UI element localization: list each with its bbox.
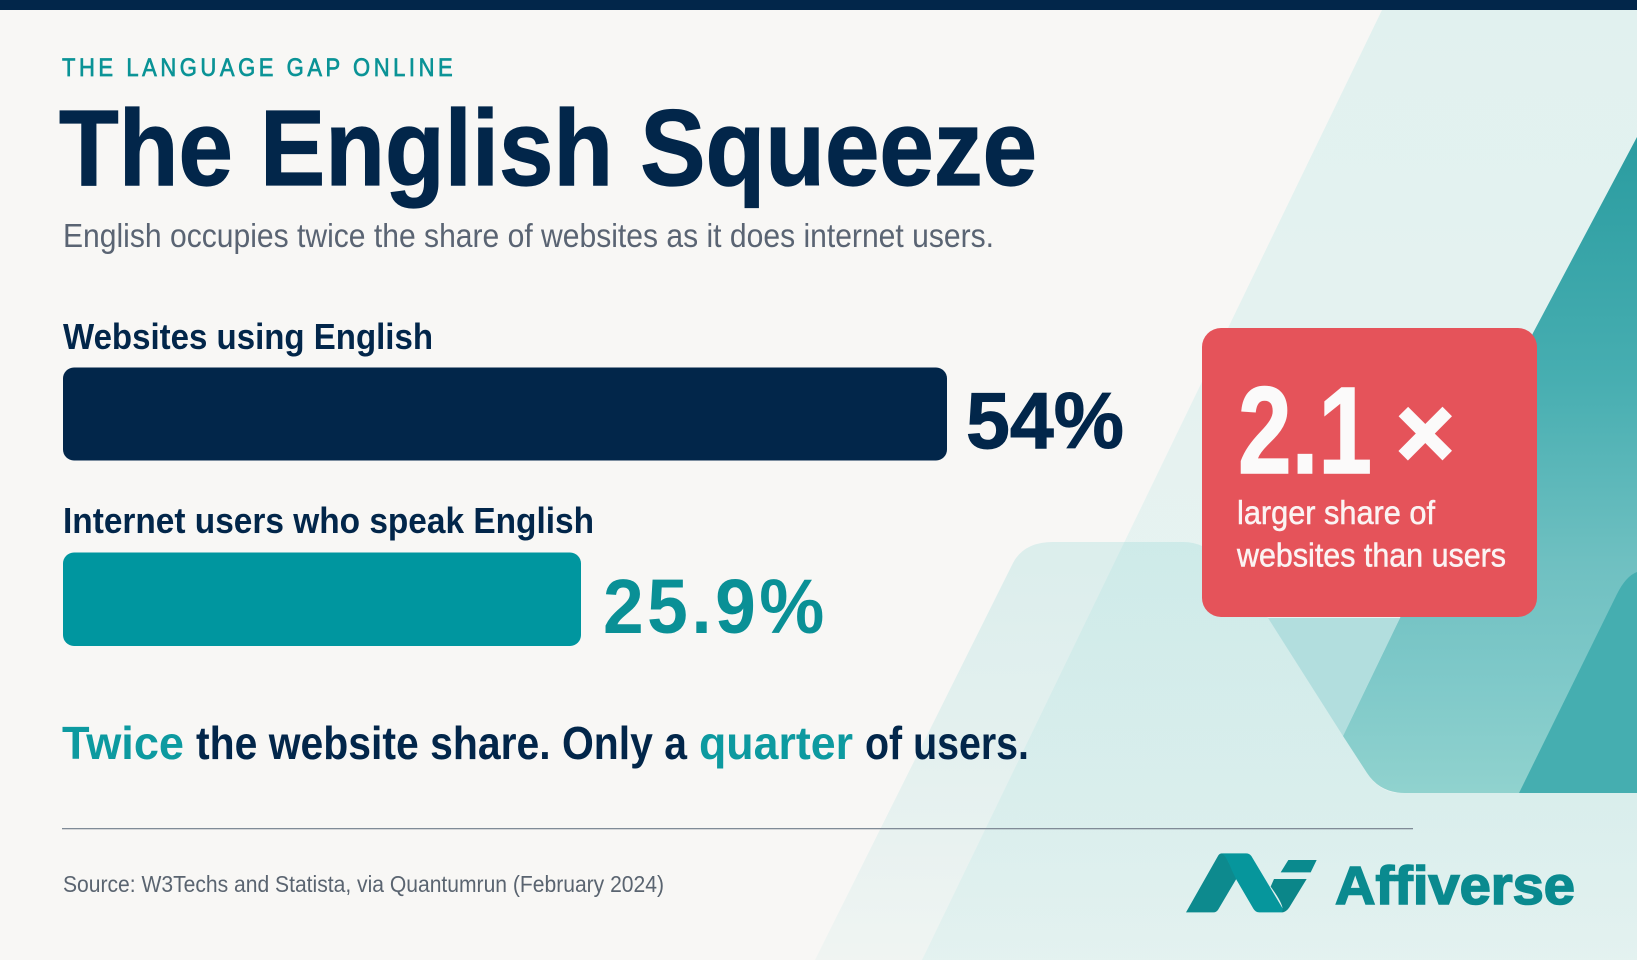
bar row: internet users who speak English (63, 500, 824, 649)
callout number: 2.1 (1238, 363, 1372, 500)
bar label: Websites using English (63, 316, 433, 357)
callout caption: websites than users (1236, 536, 1506, 574)
takeaway line: the website share. Only a (196, 717, 687, 769)
callout caption (1236, 494, 1506, 574)
callout caption: larger share of (1237, 494, 1436, 531)
subtitle: English occupies twice the share of websites as it does internet users. (63, 217, 994, 254)
bar row: websites using English (63, 316, 1124, 465)
logo mark (1186, 853, 1317, 912)
takeaway line (62, 717, 1029, 769)
source: Source: W3Techs and Statista, via Quantumrun (February 2024) (63, 871, 664, 897)
takeaway line: quarter (699, 717, 853, 769)
bar (63, 552, 581, 646)
divider (62, 828, 1413, 829)
logo wordmark: Affiverse (1335, 856, 1575, 916)
background shapes (815, 10, 1637, 960)
callout card (1202, 328, 1537, 617)
top bar (0, 0, 1637, 10)
value: 25.9% (603, 563, 824, 649)
value: 54% (966, 376, 1124, 465)
bar label: Internet users who speak English (63, 500, 594, 541)
takeaway line: of users. (865, 717, 1029, 769)
eyebrow: THE LANGUAGE GAP ONLINE (62, 54, 453, 81)
takeaway line: Twice (62, 717, 184, 769)
logo: Affiverse (1186, 853, 1575, 916)
title: The English Squeeze (59, 87, 1037, 208)
bar (63, 368, 947, 460)
callout multiply sign: × (1396, 377, 1454, 489)
